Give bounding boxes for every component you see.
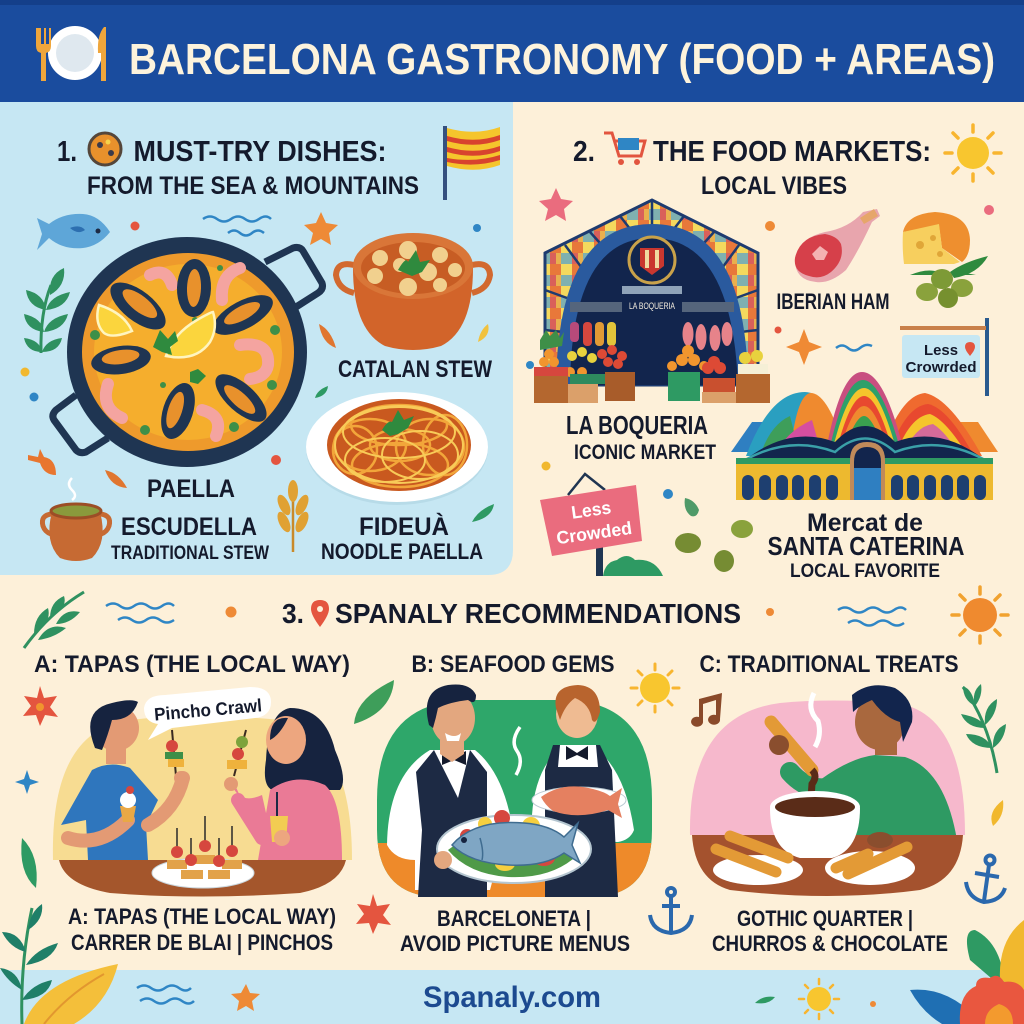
- icon: fish: [37, 214, 110, 250]
- heading: section 1: 1.: [57, 136, 77, 168]
- steam: [514, 727, 520, 775]
- icon: escudella bowl: [42, 478, 110, 561]
- icon: anchor: [650, 888, 692, 933]
- skewers: [172, 730, 246, 776]
- website: Spanaly.com: [423, 981, 601, 1014]
- panel: food markets: [526, 125, 1001, 582]
- header banner: [0, 0, 1024, 102]
- woman: [265, 708, 343, 790]
- illustration: La Boqueria market: [534, 200, 770, 403]
- icon: plate and cutlery: [36, 26, 106, 81]
- caption C: CHURROS & CHOCOLATE: [712, 931, 948, 956]
- sign: less crowded (pink): [540, 474, 663, 576]
- decorations: [20, 212, 494, 522]
- caption A: CARRER DE BLAI | PINCHOS: [71, 930, 333, 955]
- illustration: fideua plate: [306, 392, 488, 505]
- subheading C: C: TRADITIONAL TREATS: [700, 651, 958, 678]
- man: [61, 764, 158, 860]
- foliage bottom left: [0, 904, 118, 1024]
- icon: wheat: [275, 480, 311, 552]
- heading: section 2: LOCAL VIBES: [701, 172, 847, 200]
- label: Mercat de Santa Caterina: [768, 509, 965, 582]
- illustration: paella pan: [53, 237, 322, 467]
- illustration: Catalan stew pot: [336, 233, 490, 350]
- illustration: Iberian ham: [795, 209, 880, 282]
- speech bubble: Pincho Crawl: [153, 695, 263, 725]
- label: Iberian ham: IBERIAN HAM: [776, 289, 890, 314]
- sign: less crowded (blue): [900, 318, 989, 396]
- waiter left: [387, 750, 510, 890]
- caption C: GOTHIC QUARTER |: [737, 906, 913, 931]
- icon: anchor right: [966, 856, 1005, 902]
- label: fideua: [321, 512, 483, 564]
- sign: less crowded (blue): Crowrded: [906, 359, 976, 376]
- icons: leaves and sun: [21, 664, 1006, 888]
- caption A: A: TAPAS (THE LOCAL WAY): [68, 904, 336, 929]
- caption B: [400, 906, 630, 956]
- label: Mercat de Santa Caterina: Mercat de: [807, 509, 923, 537]
- label: fideua: NOODLE PAELLA: [321, 539, 483, 564]
- icon: sun: [945, 125, 1001, 181]
- label: La Boqueria: [566, 410, 716, 464]
- sign: less crowded (blue): Less: [924, 342, 958, 359]
- small plate with fish: [532, 787, 626, 813]
- heading: section 3: 3.: [282, 598, 304, 629]
- illustration: olives: [910, 256, 988, 308]
- icon: leaf branch: [24, 268, 70, 353]
- illustration: cheese wedge: [903, 212, 970, 264]
- panel: must-try dishes: [0, 102, 513, 575]
- icon: leaf branch left: [24, 592, 84, 648]
- label: La Boqueria: ICONIC MARKET: [574, 441, 716, 464]
- subheading A: A: TAPAS (THE LOCAL WAY): [34, 651, 350, 678]
- caption B: AVOID PICTURE MENUS: [400, 931, 630, 956]
- heading: section 2: 2.: [573, 136, 595, 168]
- decorations: [526, 188, 994, 572]
- panel: Spanaly recommendations: [15, 587, 1008, 956]
- caption A: [68, 904, 336, 955]
- table: [59, 860, 346, 896]
- label: escudella: TRADITIONAL STEW: [111, 543, 269, 564]
- heading: section 2: [573, 133, 931, 200]
- icon: sun right: [952, 587, 1008, 643]
- heading: section 1: [57, 133, 419, 200]
- illustration: tapas friends: [53, 687, 352, 896]
- illustration: Mercat de Santa Caterina: [731, 372, 998, 500]
- table: [692, 835, 963, 896]
- heading: section 3: SPANALY RECOMMENDATIONS: [335, 598, 741, 629]
- label: La Boqueria: LA BOQUERIA: [566, 410, 708, 440]
- caption C: [712, 906, 948, 956]
- heading: section 1: FROM THE SEA & MOUNTAINS: [87, 172, 419, 200]
- label: Mercat de Santa Caterina: SANTA CATERINA: [768, 531, 965, 561]
- big plate: [437, 815, 591, 883]
- sign: less crowded (pink): Crowded: [555, 518, 633, 548]
- icon: Catalan flag: [443, 126, 500, 200]
- label: Mercat de Santa Caterina: LOCAL FAVORITE: [790, 561, 940, 582]
- label: fideua: FIDEUÀ: [359, 512, 449, 541]
- heading: section 1: MUST-TRY DISHES:: [134, 136, 386, 168]
- caption B: BARCELONETA |: [437, 906, 591, 931]
- label: Catalan stew: CATALAN STEW: [338, 356, 492, 383]
- footer band: [0, 970, 1024, 1024]
- illustration: La Boqueria market: LA BOQUERIA: [629, 301, 675, 311]
- subheading B: B: SEAFOOD GEMS: [412, 651, 614, 678]
- waiter right: [532, 748, 634, 842]
- label: paella: PAELLA: [147, 475, 235, 503]
- foliage bottom right: [910, 920, 1024, 1024]
- heading: section 2: THE FOOD MARKETS:: [653, 136, 931, 168]
- decorations: [15, 604, 906, 934]
- sign: less crowded (pink): Less: [570, 497, 612, 523]
- label: escudella: ESCUDELLA: [121, 513, 257, 541]
- illustration: seafood waiters: [377, 684, 653, 897]
- bowl: [770, 808, 860, 858]
- speech bubble: [144, 687, 271, 740]
- illustration: churros and chocolate: [690, 685, 965, 896]
- label: escudella: [111, 513, 269, 564]
